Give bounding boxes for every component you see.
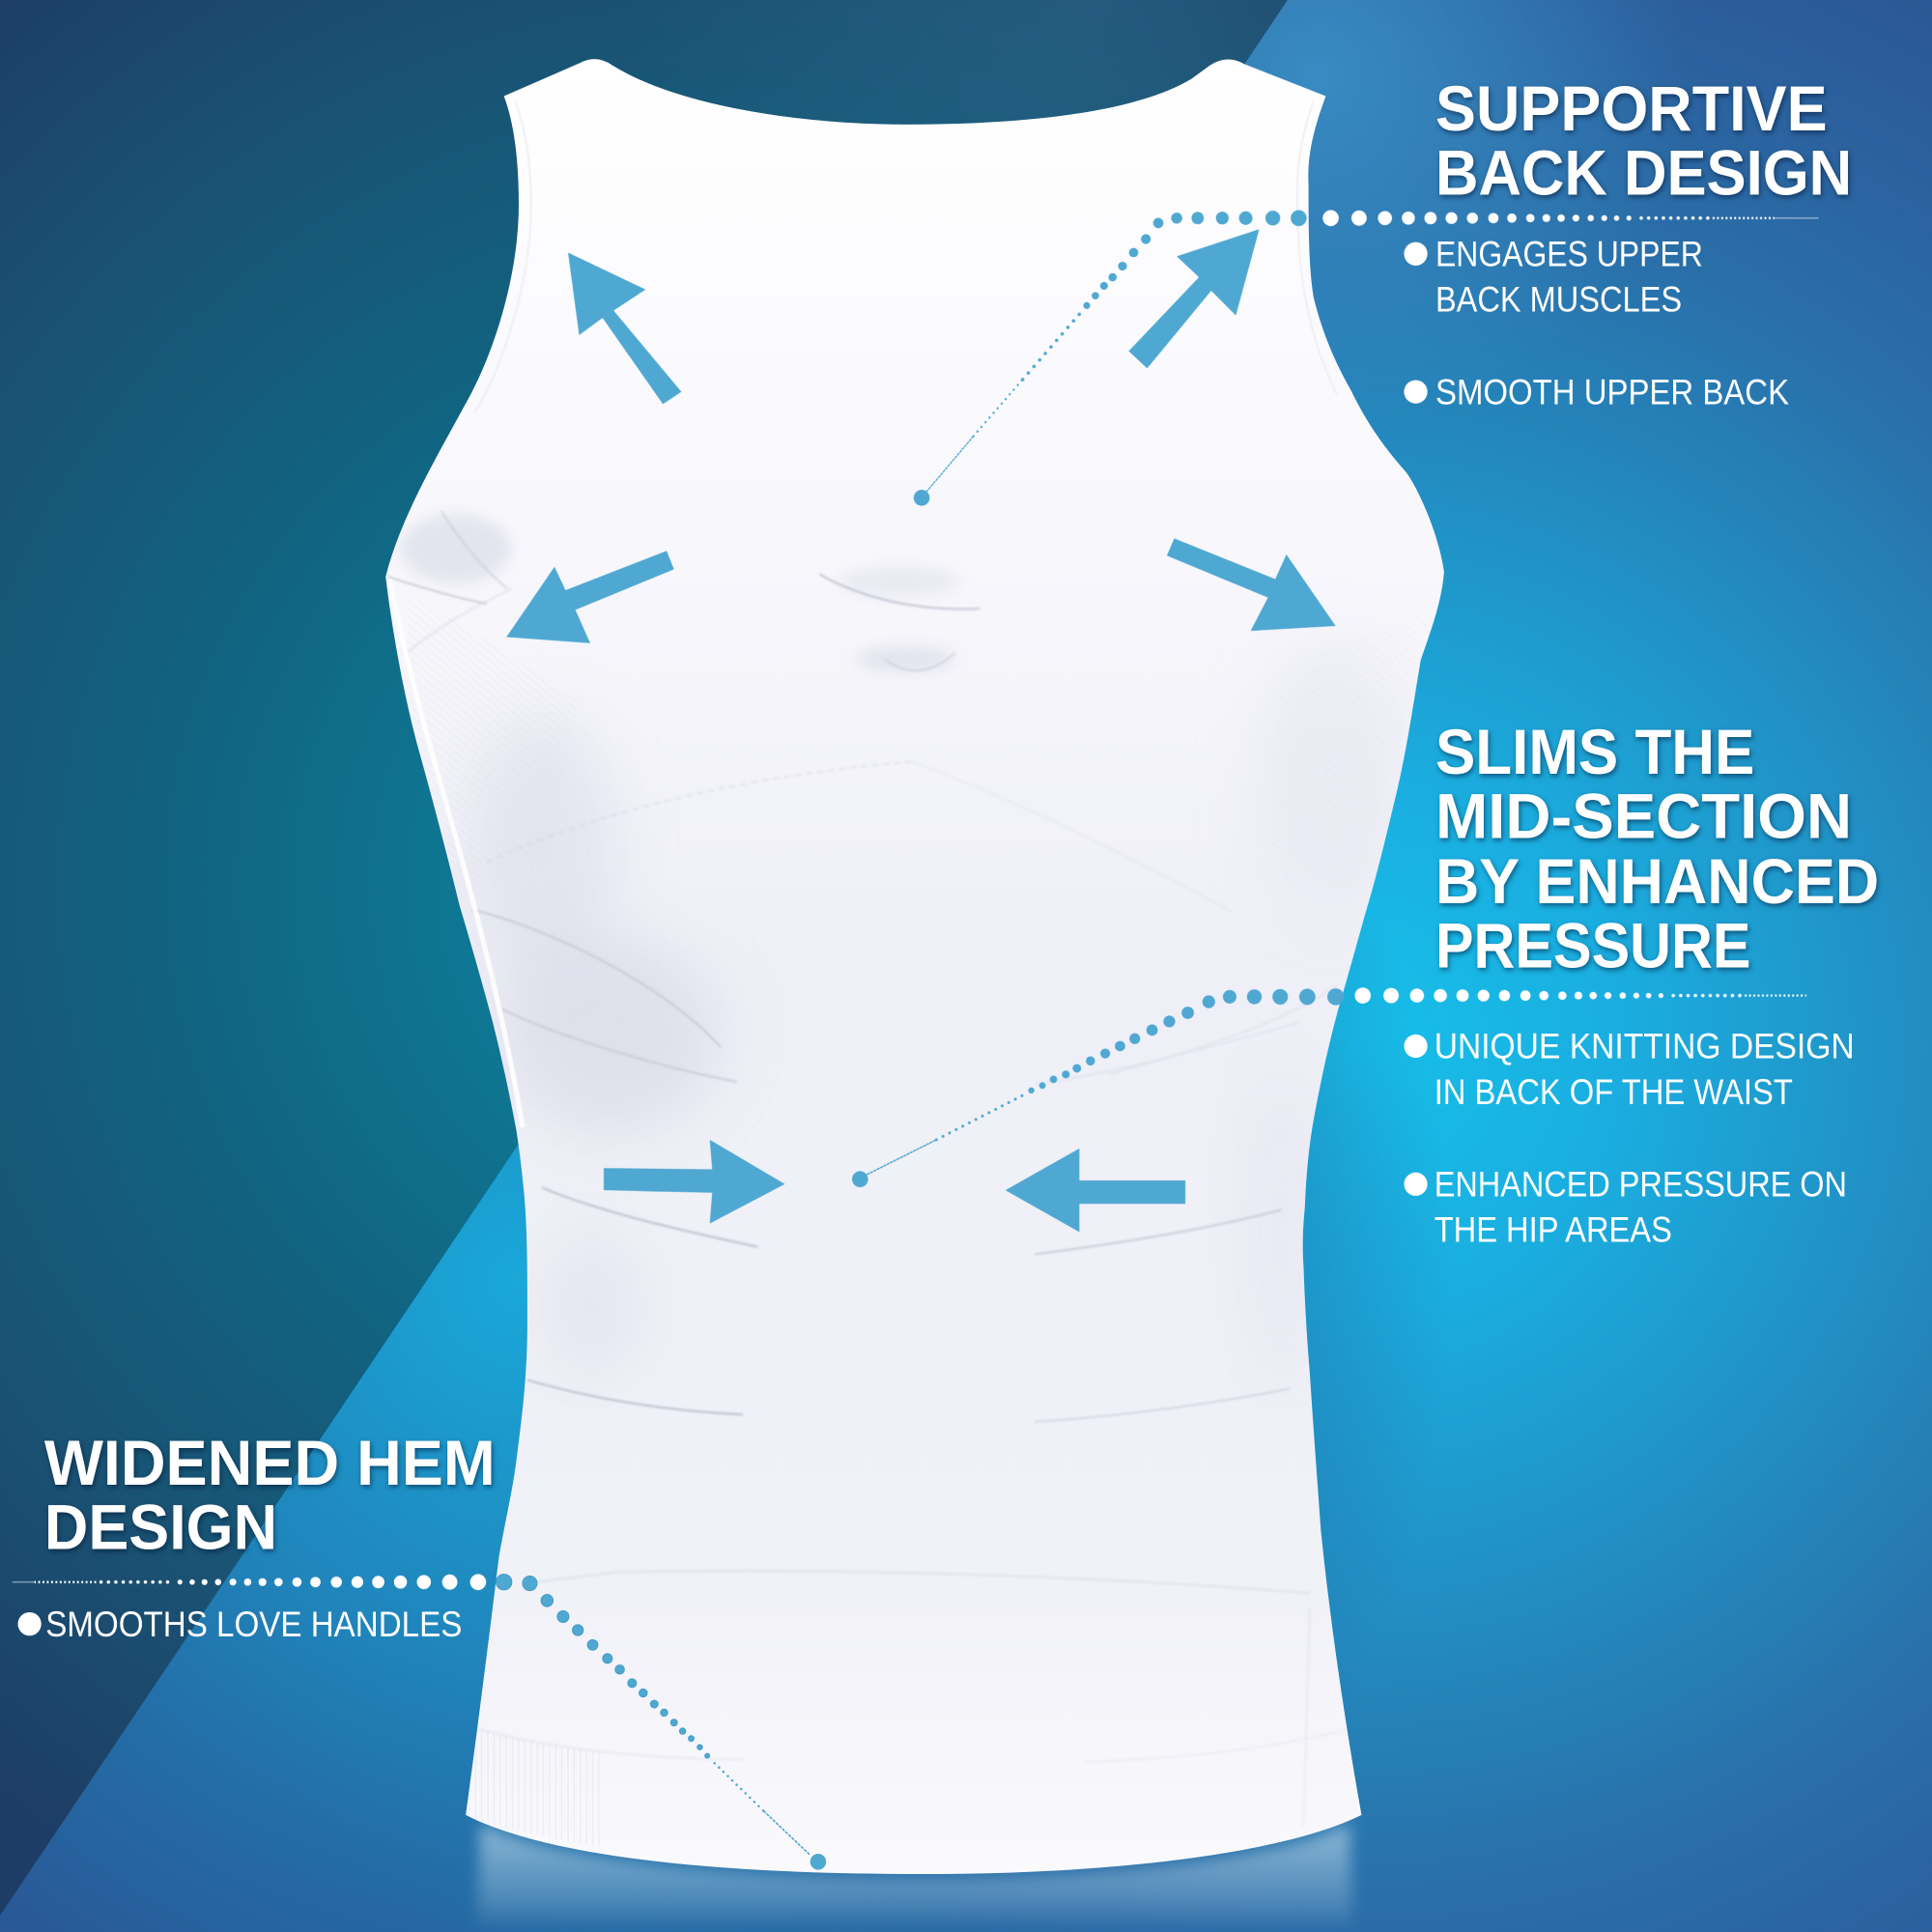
heading: widened hem design: WIDENED HEM	[44, 1428, 496, 1499]
background: dark panel top highlight	[616, 0, 1288, 523]
heading: slims the mid-section: SLIMS THE	[1435, 717, 1754, 788]
heading: widened hem design: DESIGN	[44, 1492, 277, 1563]
bullet list: slims the mid-section: ENHANCED PRESSURE ON	[1435, 1165, 1847, 1205]
white compression vest	[385, 59, 1444, 1874]
arrow: mid left	[506, 551, 674, 643]
dotted leader: mid-section	[852, 987, 1806, 1187]
background: highlight at top of diagonal edge	[949, 0, 1688, 443]
background: dark diagonal panel	[0, 0, 1288, 1932]
arrow: mid right	[1167, 538, 1336, 631]
bullet list: widened hem design: SMOOTHS LOVE HANDLES	[45, 1605, 462, 1644]
heading: slims the mid-section: PRESSURE	[1435, 910, 1750, 981]
background: lower left glow	[0, 370, 1454, 1932]
heading: slims the mid-section	[1435, 717, 1879, 981]
arrow: waist pointing right	[604, 1140, 784, 1224]
bullet list: slims the mid-section	[1404, 1027, 1855, 1250]
arrow: upper right	[1128, 229, 1260, 368]
bullet list: supportive back design: BACK MUSCLES	[1435, 280, 1682, 320]
hem reflection	[477, 1824, 1353, 1932]
heading: slims the mid-section: MID-SECTION	[1435, 781, 1852, 852]
heading: supportive back design	[1435, 73, 1852, 210]
dotted leader: back design	[914, 210, 1819, 506]
bullet list: supportive back design: ENGAGES UPPER	[1435, 235, 1703, 274]
bullet list: supportive back design: SMOOTH UPPER BACK	[1435, 372, 1789, 412]
bullet list: slims the mid-section: IN BACK OF THE WAIST	[1435, 1072, 1793, 1112]
heading: supportive back design: SUPPORTIVE	[1435, 73, 1828, 145]
bullet list: slims the mid-section: THE HIP AREAS	[1435, 1210, 1672, 1250]
bullet list: supportive back design	[1404, 235, 1789, 412]
heading: supportive back design: BACK DESIGN	[1435, 138, 1852, 210]
dotted leader: hem	[13, 1574, 826, 1870]
heading: widened hem design	[44, 1428, 496, 1563]
bullet list: slims the mid-section: UNIQUE KNITTING DESIGN	[1435, 1027, 1855, 1066]
arrow: upper left	[568, 252, 681, 404]
arrow: waist pointing left	[1006, 1149, 1185, 1233]
heading: slims the mid-section: BY ENHANCED	[1435, 846, 1879, 918]
